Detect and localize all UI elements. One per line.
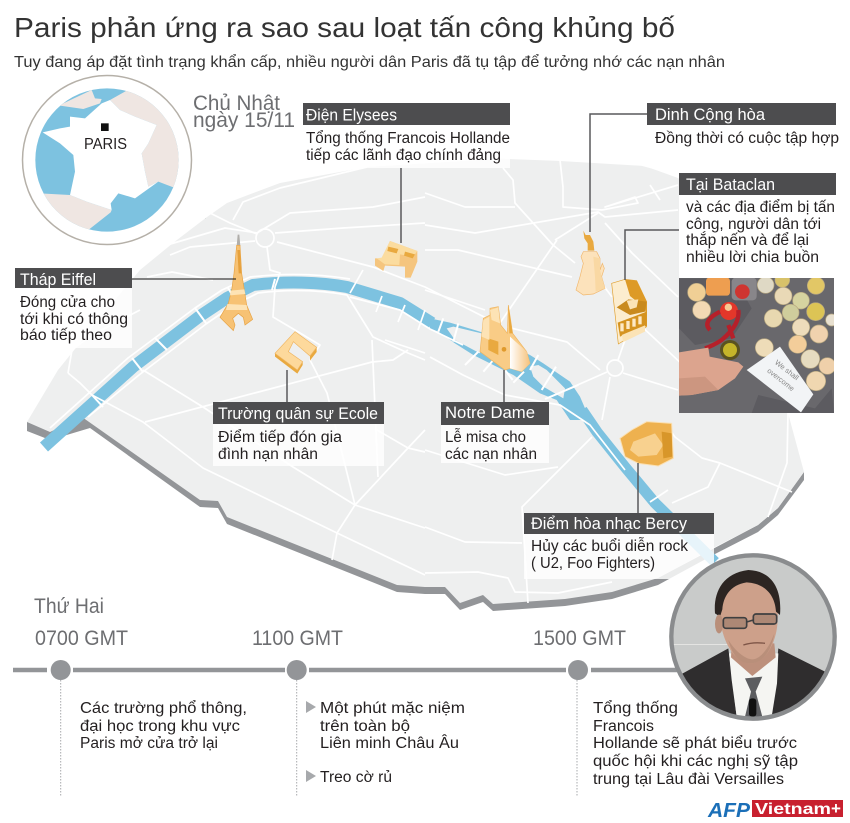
- timeline: 1100 GMT: [252, 627, 343, 650]
- landmark: Bercy arena: [620, 422, 673, 466]
- photo: candles at memorial: We shall: [773, 358, 801, 382]
- timeline text: 1100: Treo cờ rủ: [320, 769, 392, 786]
- label: Notre Dame: các nạn nhân: [445, 446, 537, 463]
- landmark: Bataclan: [612, 279, 647, 344]
- timeline: 0700 GMT: [35, 627, 128, 650]
- label: Republique: Dinh Cộng hòa: [655, 106, 766, 124]
- timeline text: 1500: trung tại Lâu đài Versailles: [593, 771, 784, 788]
- date heading: Sunday: Chủ Nhật: [193, 92, 280, 115]
- label: Bercy: Hủy các buổi diễn rock: [531, 538, 688, 555]
- label: Bataclan: Tại Bataclan: [686, 176, 775, 194]
- timeline: 1500 GMT: [533, 627, 626, 650]
- label: Bercy: [524, 463, 714, 579]
- locator map: France: PARIS: [84, 136, 127, 153]
- label: Ecole Militaire: Điểm tiếp đón gia: [218, 429, 342, 446]
- timeline text: 0700: Paris mở cửa trở lại: [80, 735, 218, 752]
- logo: AFP Vietnam+: +: [831, 799, 841, 818]
- timeline text: 0700: Các trường phổ thông,: [80, 700, 247, 717]
- label: Bataclan: nhiều lời chia buồn: [686, 249, 819, 266]
- timeline text: 1500: Tổng thống: [593, 700, 678, 717]
- title: Paris phản ứng ra sao sau loạt tấn công khủng bố: [14, 12, 675, 43]
- label: Eiffel: tới khi có thông: [20, 311, 128, 328]
- photo: candles at memorial: overcome: [765, 366, 796, 393]
- timeline text: 1500: Hollande sẽ phát biểu trước: [593, 735, 797, 752]
- landmark: Notre Dame: [480, 305, 530, 372]
- label: Notre Dame: Notre Dame: [445, 404, 535, 422]
- timeline text: 1500: [593, 700, 798, 788]
- river Seine: [44, 283, 715, 562]
- timeline text: 1100: Một phút mặc niệm: [320, 700, 465, 717]
- timeline text: 1500: quốc hội khi các nghị sỹ tập: [593, 753, 798, 770]
- label: Eiffel: [15, 268, 236, 348]
- timeline text: 1500: Francois: [593, 718, 654, 735]
- logo: AFP Vietnam+: AFP: [707, 800, 751, 822]
- logo: AFP Vietnam+: Vietnam: [755, 801, 831, 818]
- label: Bercy: Điểm hòa nhạc Bercy: [531, 515, 688, 533]
- timeline text: 0700: [80, 700, 247, 752]
- label: Ecole Militaire: [213, 370, 384, 466]
- label: Eiffel: Tháp Eiffel: [20, 271, 96, 289]
- label: Bercy: ( U2, Foo Fighters): [531, 555, 655, 572]
- timeline text: 1100: trên toàn bộ: [320, 718, 410, 735]
- timeline: Thứ Hai: [34, 595, 104, 618]
- portrait: Francois Hollande: [671, 555, 835, 723]
- date heading: Sunday: ngày 15/11: [193, 109, 295, 132]
- label: Bataclan: [625, 173, 836, 280]
- landmark: Elysee Palace: [375, 241, 417, 278]
- label: Republique: Đồng thời có cuộc tập hợp: [655, 130, 839, 147]
- label: Elysee: Điện Elysees: [306, 106, 397, 124]
- label: Notre Dame: [441, 370, 549, 463]
- landmark: Republique statue: [576, 231, 605, 295]
- label: Ecole Militaire: Trường quân sự Ecole: [218, 405, 378, 423]
- timeline: [13, 595, 690, 797]
- label: Notre Dame: Lễ misa cho: [445, 429, 526, 446]
- timeline text: 1100: [306, 700, 465, 786]
- Paris map: [27, 158, 804, 611]
- label: Bataclan: thắp nến và để lại: [686, 232, 809, 249]
- label: Elysee: tiếp các lãnh đạo chính đảng: [306, 147, 501, 164]
- timeline text: 1100: Liên minh Châu Âu: [320, 735, 459, 752]
- timeline text: 0700: đại học trong khu vực: [80, 718, 240, 735]
- date heading: Sunday: [193, 92, 295, 132]
- label: Bataclan: công, người dân tới: [686, 216, 821, 233]
- label: Ecole Militaire: đình nạn nhân: [218, 446, 318, 463]
- landmark: Ecole Militaire: [275, 332, 317, 374]
- label: Eiffel: Đóng cửa cho: [20, 294, 115, 311]
- label: Eiffel: báo tiếp theo: [20, 327, 112, 344]
- logo: AFP Vietnam+: [707, 799, 843, 822]
- subtitle: Tuy đang áp đặt tình trạng khẩn cấp, nhiều người dân Paris đã tụ tập để tưởng nhớ các nạn nhân: [14, 53, 725, 71]
- label: Republique: [590, 103, 839, 232]
- label: Bataclan: và các địa điểm bị tấn: [686, 199, 835, 216]
- photo: candles at memorial: [679, 273, 838, 413]
- roads: [50, 158, 792, 603]
- locator map: France: [22, 76, 192, 244]
- label: Elysee: Tổng thống Francois Hollande: [306, 130, 510, 147]
- label: Elysee: [303, 103, 510, 243]
- landmark: Eiffel Tower: [220, 235, 253, 331]
